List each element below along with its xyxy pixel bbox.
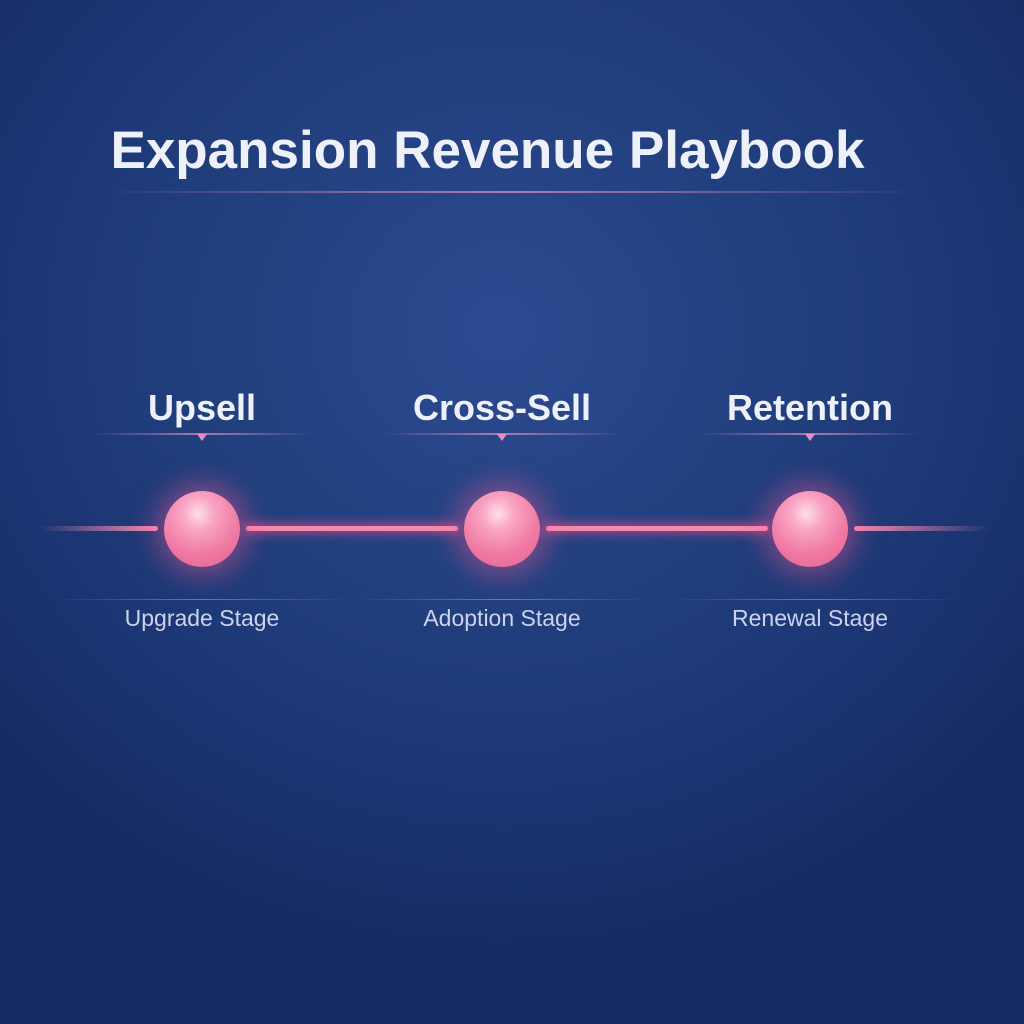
stage: Cross-Sell: Adoption Stage (423, 605, 581, 631)
stage: Upsell: Upsell (148, 387, 256, 428)
title: Expansion Revenue Playbook (110, 121, 864, 180)
stage: Cross-Sell: Cross-Sell (413, 387, 591, 428)
stage: Cross-Sell (370, 387, 634, 631)
node (164, 491, 240, 567)
node (464, 491, 540, 567)
stage: Retention: Retention (727, 387, 893, 428)
stage: Retention: Renewal Stage (732, 605, 888, 631)
stage: Upsell: Upgrade Stage (125, 605, 279, 631)
stage: Upsell (70, 387, 334, 631)
timeline line (44, 516, 985, 541)
stage: Retention (688, 387, 943, 631)
node (772, 491, 848, 567)
